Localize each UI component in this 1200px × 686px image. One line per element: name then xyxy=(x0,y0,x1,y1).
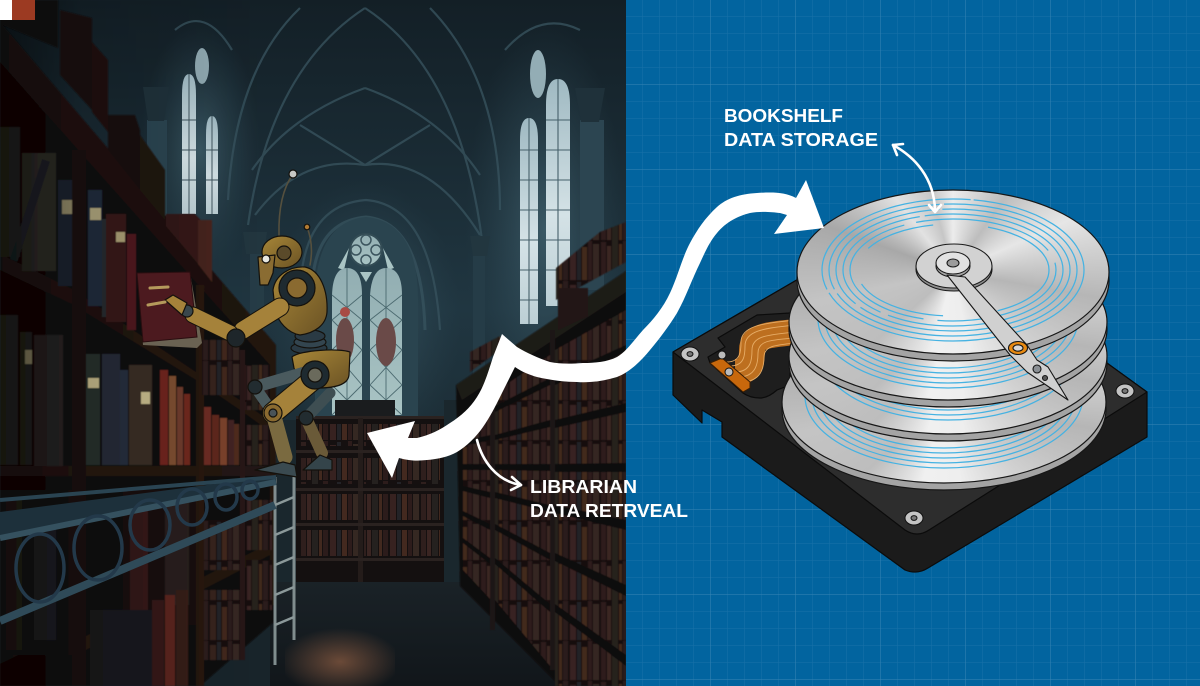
robot librarian xyxy=(148,170,350,477)
left tall window xyxy=(182,48,218,214)
corner mark xyxy=(0,0,35,20)
label: librarian: DATA RETRVEAL xyxy=(530,501,688,521)
stained glass window xyxy=(315,217,418,420)
floor xyxy=(270,622,556,686)
panel: gothic library scene xyxy=(0,0,626,686)
flex cable xyxy=(710,320,795,392)
platter 2 xyxy=(789,244,1107,407)
label: bookshelf xyxy=(724,106,878,150)
head xyxy=(262,236,302,268)
platter 1 with tracks xyxy=(797,190,1109,361)
panel: blueprint background xyxy=(626,0,1200,686)
back bookcase xyxy=(296,400,444,582)
arm xyxy=(243,307,280,330)
label: bookshelf: BOOKSHELF xyxy=(724,106,843,126)
shelf boards xyxy=(0,254,276,436)
platter 4 xyxy=(782,321,1106,490)
books upper row xyxy=(0,127,20,257)
far leg xyxy=(306,393,330,418)
shoulder xyxy=(279,270,315,306)
antennae xyxy=(279,174,293,235)
torso xyxy=(273,267,327,335)
right bookcase xyxy=(456,222,626,686)
railing and ladder xyxy=(0,476,294,665)
hard drive illustration xyxy=(673,190,1147,572)
books middle row xyxy=(0,315,18,465)
right tall window xyxy=(520,50,570,324)
drive base xyxy=(673,217,1147,572)
pelvis xyxy=(292,350,350,388)
label: bookshelf: DATA STORAGE xyxy=(724,130,878,150)
label: librarian xyxy=(530,477,688,521)
platter 3 xyxy=(789,278,1107,441)
side walls beside back bookcase xyxy=(283,400,456,452)
vaulted ceiling ribs xyxy=(175,8,580,330)
callout arrow: bookshelf xyxy=(893,144,941,212)
screws xyxy=(681,347,1134,525)
foreground left bookcase xyxy=(0,0,276,686)
actuator arm xyxy=(947,275,1068,400)
pillars xyxy=(143,87,605,373)
label: librarian: LIBRARIAN xyxy=(530,477,637,497)
central wall glow xyxy=(316,251,427,374)
books lower rows xyxy=(0,490,72,655)
hip and front leg xyxy=(255,373,303,387)
main double-headed arrow xyxy=(367,180,824,478)
spindle hub xyxy=(916,244,992,291)
waist rings xyxy=(290,344,328,354)
pulled-out book xyxy=(137,272,202,348)
sunlight on floor xyxy=(285,625,395,686)
callout arrow: librarian xyxy=(477,440,521,490)
